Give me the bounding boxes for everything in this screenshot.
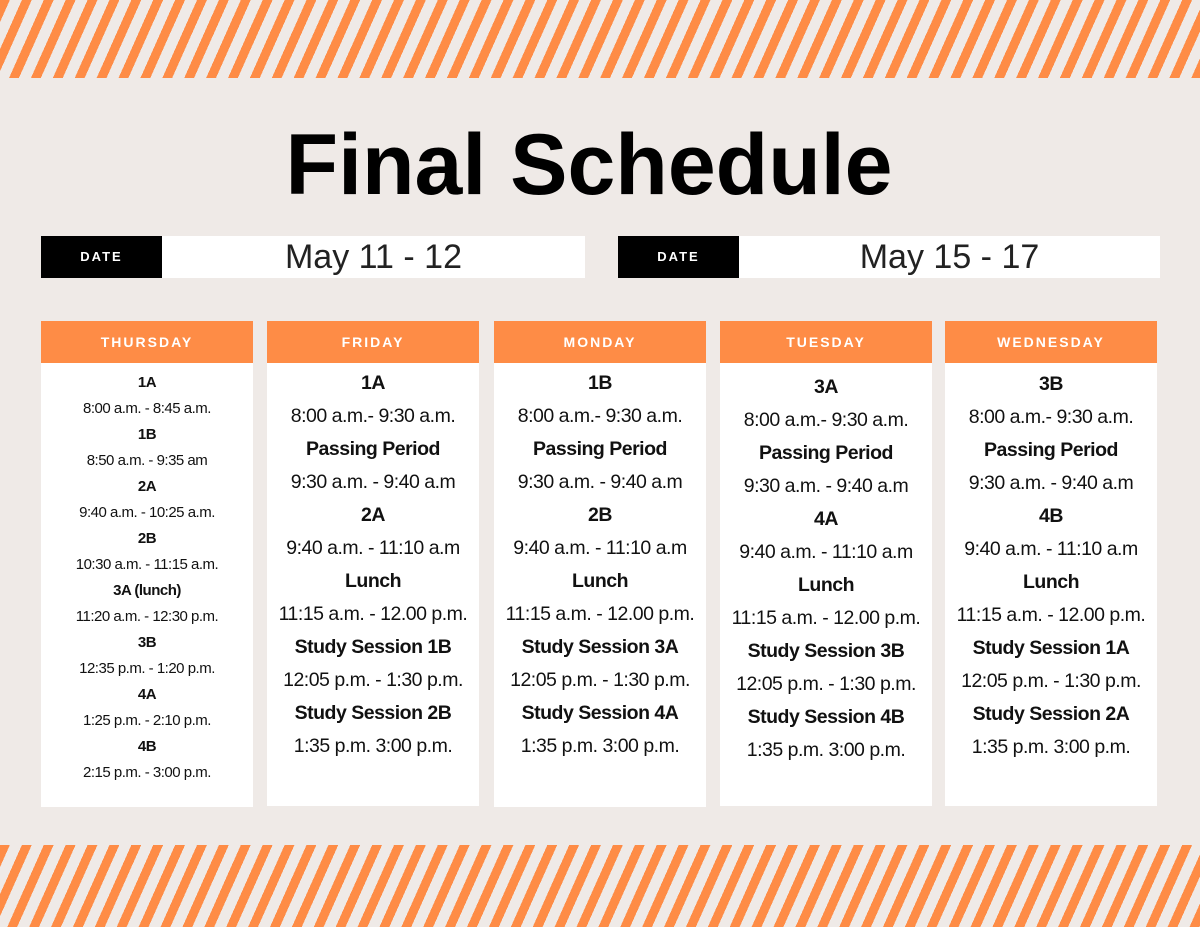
panel: tuesday: 12:05 p.m. - 1:30 p.m.: [736, 673, 916, 695]
panel: friday: 1:35 p.m. 3:00 p.m.: [294, 735, 452, 757]
date label right: [618, 236, 739, 278]
panel: friday: 8:00 a.m.- 9:30 a.m.: [291, 405, 455, 427]
panel: wednesday: 11:15 a.m. - 12.00 p.m.: [957, 604, 1145, 626]
panel: friday: FRIDAY: [342, 334, 404, 350]
panel: monday: 9:40 a.m. - 11:10 a.m: [513, 537, 687, 559]
panel: wednesday: [945, 321, 1157, 806]
date value right: [739, 236, 1160, 278]
panel: wednesday: 3B: [1039, 373, 1063, 395]
panel: monday: Study Session 3A: [522, 636, 678, 658]
panel: monday: 12:05 p.m. - 1:30 p.m.: [510, 669, 690, 691]
panel: wednesday: 12:05 p.m. - 1:30 p.m.: [961, 670, 1141, 692]
panel: tuesday: [720, 321, 932, 806]
panel: tuesday: 11:15 a.m. - 12.00 p.m.: [732, 607, 920, 629]
panel: tuesday: TUESDAY: [786, 334, 866, 350]
panel: thursday: 2:15 p.m. - 3:00 p.m.: [83, 764, 211, 781]
panel: friday: 11:15 a.m. - 12.00 p.m.: [279, 603, 467, 625]
panel: thursday: 2B: [138, 530, 156, 547]
panel: wednesday: 1:35 p.m. 3:00 p.m.: [972, 736, 1130, 758]
date label right: DATE: [657, 249, 700, 264]
panel: thursday: 12:35 p.m. - 1:20 p.m.: [79, 660, 215, 677]
panel: tuesday: 9:30 a.m. - 9:40 a.m: [744, 475, 908, 497]
panel: wednesday: Lunch: [1023, 571, 1079, 593]
panel: thursday: 10:30 a.m. - 11:15 a.m.: [76, 556, 218, 573]
date value right: May 15 - 17: [860, 238, 1039, 276]
panel: thursday: 1:25 p.m. - 2:10 p.m.: [83, 712, 211, 729]
panel: monday: Passing Period: [533, 438, 667, 460]
panel: monday: 11:15 a.m. - 12.00 p.m.: [506, 603, 694, 625]
title: Final Schedule: [286, 117, 892, 213]
panel: thursday: 8:00 a.m. - 8:45 a.m.: [83, 400, 211, 417]
panel: tuesday: 4A: [814, 508, 838, 530]
panel: wednesday: 9:40 a.m. - 11:10 a.m: [964, 538, 1138, 560]
panel: friday: 1A: [361, 372, 385, 394]
panel: thursday: 3B: [138, 634, 156, 651]
panel: monday: Lunch: [572, 570, 628, 592]
panel: wednesday: 4B: [1039, 505, 1063, 527]
panel: wednesday: Study Session 2A: [973, 703, 1129, 725]
panel: friday: Study Session 2B: [295, 702, 451, 724]
panel: thursday: 1B: [138, 426, 156, 443]
panel: monday: Study Session 4A: [522, 702, 678, 724]
panel: friday: 2A: [361, 504, 385, 526]
panel: wednesday: WEDNESDAY: [997, 334, 1105, 350]
panel: friday: 9:40 a.m. - 11:10 a.m: [286, 537, 460, 559]
panel: friday: [267, 321, 479, 806]
panel: wednesday: Passing Period: [984, 439, 1118, 461]
panel: thursday: 9:40 a.m. - 10:25 a.m.: [79, 504, 215, 521]
panel: thursday: 2A: [138, 478, 156, 495]
panel: thursday: 4A: [138, 686, 156, 703]
panel: friday: Study Session 1B: [295, 636, 451, 658]
panel: wednesday: 8:00 a.m.- 9:30 a.m.: [969, 406, 1133, 428]
panel: wednesday: 9:30 a.m. - 9:40 a.m: [969, 472, 1133, 494]
date value left: May 11 - 12: [285, 238, 462, 276]
panel: tuesday: 3A: [814, 376, 838, 398]
panel: tuesday: Study Session 4B: [748, 706, 904, 728]
panel: tuesday: 8:00 a.m.- 9:30 a.m.: [744, 409, 908, 431]
panel: thursday: THURSDAY: [101, 334, 193, 350]
panel: thursday: [41, 321, 253, 807]
panel: tuesday: 9:40 a.m. - 11:10 a.m: [739, 541, 913, 563]
panel: friday: 12:05 p.m. - 1:30 p.m.: [283, 669, 463, 691]
panel: monday: 2B: [588, 504, 612, 526]
panel: thursday: 11:20 a.m. - 12:30 p.m.: [76, 608, 218, 625]
panel: friday: Lunch: [345, 570, 401, 592]
panel: monday: 9:30 a.m. - 9:40 a.m: [518, 471, 682, 493]
panel: friday: 9:30 a.m. - 9:40 a.m: [291, 471, 455, 493]
panel: monday: 8:00 a.m.- 9:30 a.m.: [518, 405, 682, 427]
date label left: DATE: [80, 249, 123, 264]
panel: thursday: 1A: [138, 374, 156, 391]
panel: thursday: 3A (lunch): [113, 582, 181, 599]
panel: monday: 1:35 p.m. 3:00 p.m.: [521, 735, 679, 757]
panel: tuesday: Passing Period: [759, 442, 893, 464]
panel: friday: Passing Period: [306, 438, 440, 460]
date value left: [162, 236, 585, 278]
panel: tuesday: 1:35 p.m. 3:00 p.m.: [747, 739, 905, 761]
panel: monday: [494, 321, 706, 807]
panel: tuesday: Study Session 3B: [748, 640, 904, 662]
panel: wednesday: Study Session 1A: [973, 637, 1129, 659]
panel: monday: 1B: [588, 372, 612, 394]
panel: thursday: 4B: [138, 738, 156, 755]
panel: tuesday: Lunch: [798, 574, 854, 596]
panel: thursday: 8:50 a.m. - 9:35 am: [87, 452, 207, 469]
panel: monday: MONDAY: [564, 334, 636, 350]
date label left: [41, 236, 162, 278]
